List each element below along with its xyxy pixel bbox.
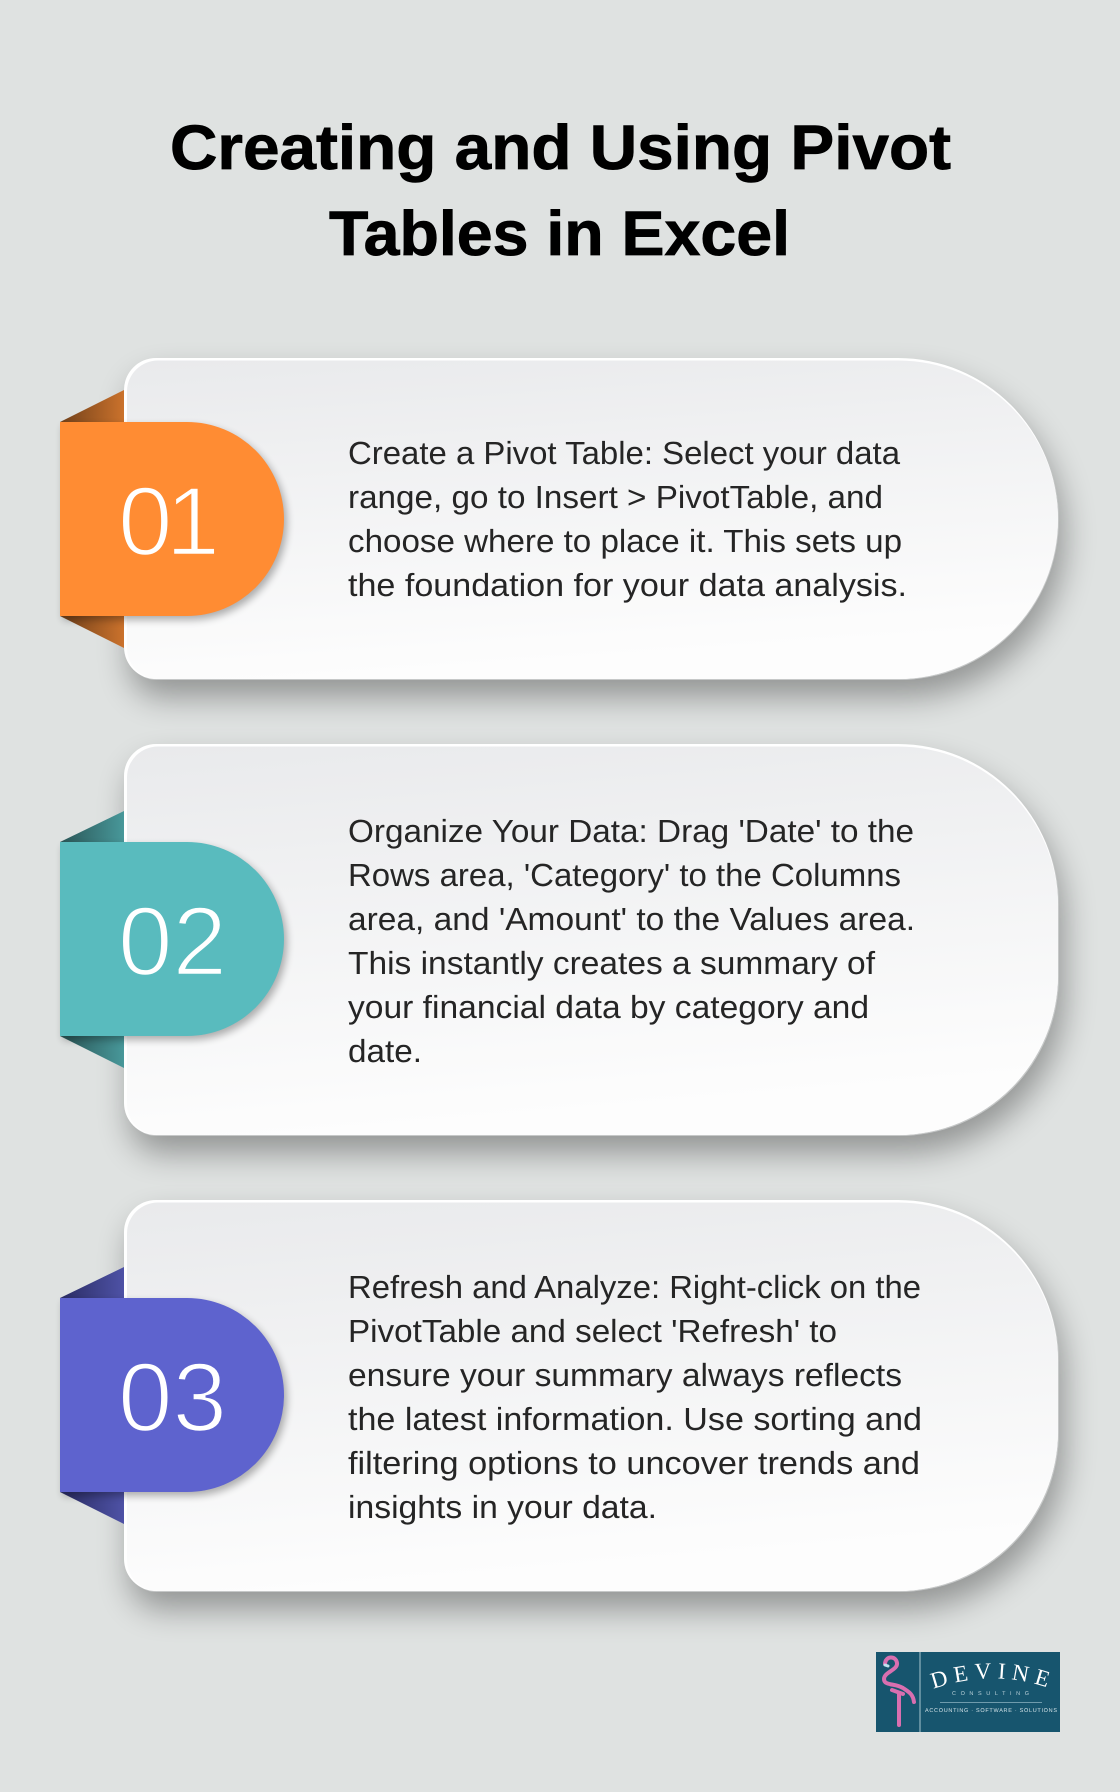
ribbon fold 3	[60, 1267, 124, 1524]
text block 2: Rows area, 'Category' to the Columns	[348, 857, 901, 893]
panel: step 3	[60, 1200, 1064, 1609]
text block 2: Organize Your Data: Drag 'Date' to the	[348, 813, 914, 849]
text block 2: your financial data by category and	[348, 989, 869, 1025]
text block 3: Refresh and Analyze: Right-click on the	[348, 1269, 921, 1305]
card background 3	[124, 1200, 1064, 1609]
logo tagline: ACCOUNTING · SOFTWARE · SOLUTIONS	[925, 1708, 1057, 1714]
text block 1: range, go to Insert > PivotTable, and	[348, 479, 883, 515]
panel: step 2	[60, 744, 1064, 1153]
text block 1	[348, 435, 907, 603]
text block 2: date.	[348, 1033, 422, 1069]
card background 1	[124, 358, 1064, 697]
text block 2	[348, 813, 915, 1069]
text block 3: PivotTable and select 'Refresh' to	[348, 1313, 837, 1349]
number badge 1: 01	[118, 466, 220, 576]
number badge 3: 03	[118, 1342, 227, 1452]
panel: step 1	[60, 358, 1064, 697]
text block 3: the latest information. Use sorting and	[348, 1401, 922, 1437]
text block 1: choose where to place it. This sets up	[348, 523, 902, 559]
text block 1: Create a Pivot Table: Select your data	[348, 435, 900, 471]
number badge 2	[60, 842, 287, 1040]
text block 3: insights in your data.	[348, 1489, 657, 1525]
number badge 3	[60, 1298, 287, 1496]
number badge 2: 02	[118, 886, 227, 996]
title: Tables in Excel	[329, 199, 790, 269]
logo wordmark: DEVINE	[930, 1663, 1050, 1688]
text block 2: area, and 'Amount' to the Values area.	[348, 901, 915, 937]
text block 3: filtering options to uncover trends and	[348, 1445, 920, 1481]
title	[170, 113, 951, 269]
text block 1: the foundation for your data analysis.	[348, 567, 907, 603]
icon: flamingo	[884, 1657, 914, 1725]
card background 2	[124, 744, 1064, 1153]
ribbon fold 2	[60, 811, 124, 1068]
logo: Devine Consulting	[876, 1652, 1060, 1732]
text block 3: ensure your summary always reflects	[348, 1357, 902, 1393]
logo subtitle: CONSULTING	[952, 1691, 1029, 1697]
number badge 1	[60, 422, 287, 620]
ribbon fold 1	[60, 390, 124, 648]
title: Creating and Using Pivot	[170, 113, 951, 183]
text block 3	[348, 1269, 922, 1525]
text block 2: This instantly creates a summary of	[348, 945, 875, 981]
